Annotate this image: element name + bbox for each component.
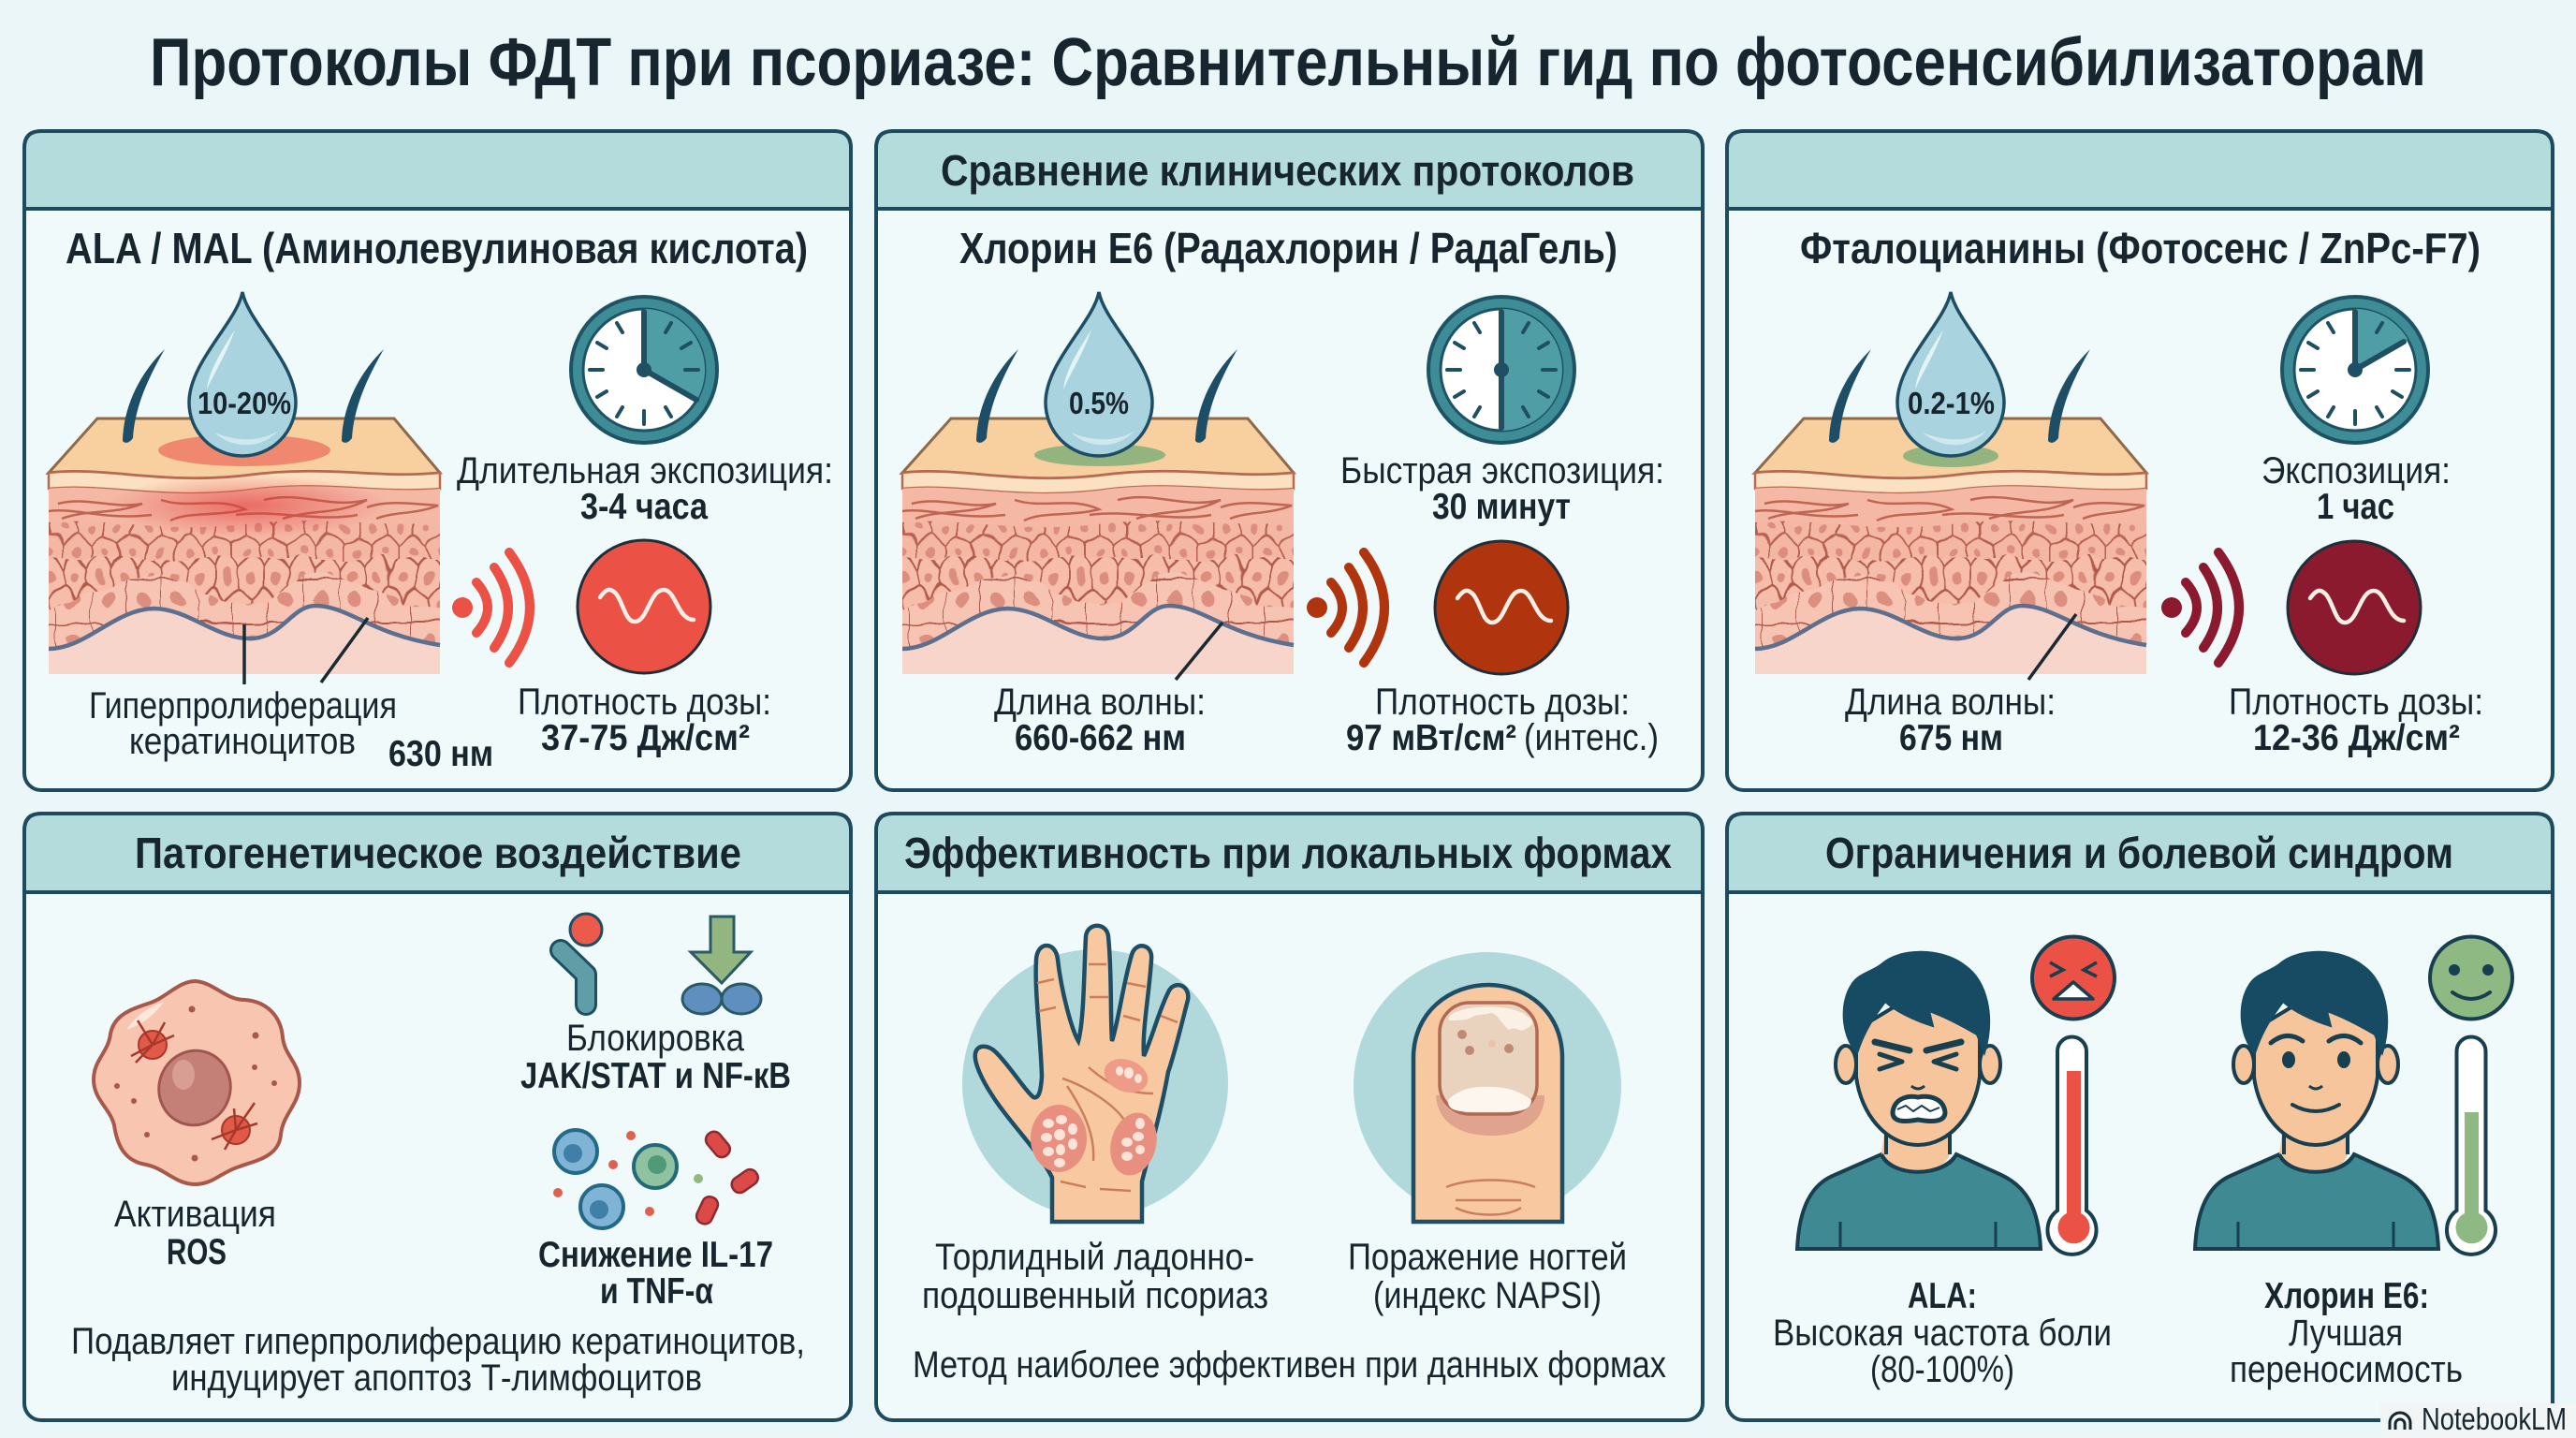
icon: high pain thermometer — [2048, 1037, 2097, 1255]
icon: clock 1 hour — [2282, 297, 2428, 443]
icon: wave circle — [578, 540, 710, 673]
label: ALA pain: ALA: — [1908, 1276, 1977, 1316]
heading: ALA / MAL: ALA / MAL (Аминолевулиновая кислота) — [66, 224, 808, 272]
label: Chlorin tolerance: переносимость — [2230, 1349, 2463, 1390]
icon: palm with plaques — [962, 926, 1228, 1222]
label: nail lesion: Поражение ногтей — [1348, 1237, 1627, 1278]
label: hyperproliferation: кератиноцитов — [129, 721, 356, 762]
dose density: 37-75 Дж/см² — [541, 718, 750, 758]
label: JAK/STAT block: Блокировка — [566, 1018, 745, 1059]
dose density: 12-36 Дж/см² — [2253, 718, 2460, 758]
dose density — [1346, 682, 1659, 758]
summary text — [71, 1321, 805, 1399]
icon: wave circle — [1435, 541, 1568, 674]
skin cross-section with drop: 0.5% — [1069, 386, 1129, 420]
label: ROS activation — [114, 1194, 276, 1272]
icon: receptor — [561, 914, 602, 1005]
dose density: 97 мВт/см² — [1346, 718, 1516, 758]
label: cytokines reduction: и TNF-α — [600, 1271, 713, 1312]
skin cross-section with lesion and drop: 10-20% — [198, 386, 291, 420]
label: ALA pain: (80-100%) — [1870, 1349, 2014, 1390]
heading: Ограничения и болевой синдром — [1825, 829, 2453, 877]
dose density — [2229, 682, 2483, 758]
icon: angry emoji — [2032, 936, 2115, 1019]
summary text: индуцирует апоптоз Т-лимфоцитов — [171, 1357, 702, 1399]
heading: Патогенетическое воздействие — [135, 829, 741, 877]
label: hyperproliferation — [89, 685, 397, 762]
icon: cell with ROS — [94, 981, 300, 1184]
label: cytokines reduction: Снижение IL-17 — [538, 1235, 773, 1275]
label: Chlorin tolerance: Лучшая — [2289, 1313, 2403, 1354]
label: ALA pain: Высокая частота боли — [1773, 1313, 2112, 1354]
icon: blocking arrow and ovals — [682, 917, 761, 1014]
panel: Phthalocyanines protocol — [1727, 131, 2553, 790]
summary text: Метод наиболее эффективен при данных формах — [913, 1344, 1666, 1386]
panel: limitations and pain — [1727, 814, 2553, 1420]
label: ALA pain — [1773, 1276, 2112, 1390]
dose density — [518, 682, 771, 758]
icon: calm person — [2195, 952, 2438, 1249]
exposure text: 3-4 часа — [580, 487, 708, 527]
skin cross-section with drop: 0.2-1% — [1908, 386, 1995, 420]
exposure text: Быстрая экспозиция: — [1340, 450, 1664, 492]
wavelength — [1845, 682, 2056, 758]
exposure text — [1340, 450, 1664, 527]
exposure text — [2261, 450, 2451, 527]
icon: light signal — [2161, 552, 2239, 663]
panel: efficacy in local forms — [876, 814, 1703, 1420]
exposure text — [457, 450, 833, 527]
skin cross-section with lesion and drop — [30, 292, 459, 684]
label: palmoplantar psoriasis: Торлидный ладонно- — [935, 1237, 1254, 1278]
exposure text: Длительная экспозиция: — [457, 450, 833, 492]
skin cross-section with drop — [1736, 292, 2165, 680]
label: Chlorin tolerance — [2230, 1276, 2463, 1390]
label: palmoplantar psoriasis — [922, 1237, 1268, 1316]
section heading: Сравнение клинических протоколов — [941, 146, 1634, 195]
icon: light signal — [1307, 552, 1384, 663]
heading: Phthalocyanines: Фталоцианины (Фотосенс / ZnPc-F7) — [1800, 224, 2481, 272]
wavelength: 675 нм — [1899, 718, 2003, 758]
wavelength: 660-662 нм — [1015, 718, 1186, 758]
icon: immune cells and cytokines — [553, 1128, 761, 1228]
label: JAK/STAT block — [520, 1018, 791, 1096]
heading: Chlorin E6: Хлорин Е6 (Радахлорин / РадаГель) — [959, 224, 1617, 272]
exposure text: 1 час — [2317, 487, 2394, 527]
icon: clock 30 minutes — [1428, 297, 1574, 443]
icon: happy emoji — [2430, 936, 2512, 1019]
panel: pathogenetic action — [24, 814, 851, 1420]
icon: light signal — [452, 552, 530, 663]
dose density: Плотность дозы: — [518, 682, 771, 723]
icon: nail with psoriasis — [1354, 952, 1621, 1222]
icon: wave circle — [2288, 541, 2421, 674]
label: palmoplantar psoriasis: подошвенный псориаз — [922, 1275, 1268, 1316]
exposure text: 30 минут — [1432, 487, 1571, 527]
panel: Chlorin E6 protocol — [876, 131, 1703, 790]
skin cross-section with drop — [884, 292, 1312, 680]
icon: low pain thermometer — [2447, 1037, 2496, 1255]
heading: Эффективность при локальных формах — [904, 829, 1672, 877]
icon: person in pain — [1797, 952, 2041, 1249]
wavelength: Длина волны: — [994, 682, 1206, 723]
summary text: Подавляет гиперпролиферацию кератиноцитов, — [71, 1321, 805, 1362]
label: Chlorin tolerance: Хлорин Е6: — [2264, 1276, 2429, 1316]
panel: ALA / MAL protocol — [24, 131, 851, 790]
label: ROS activation: Активация — [114, 1194, 276, 1235]
wavelength — [994, 682, 1206, 758]
label: hyperproliferation: Гиперпролиферация — [89, 685, 397, 726]
wavelength: 630 нм — [388, 734, 493, 774]
dose density: (интенс.) — [1524, 717, 1659, 758]
dose density: Плотность дозы: — [1375, 682, 1630, 723]
label: cytokines reduction — [538, 1235, 773, 1312]
icon: clock 3-4 hours — [571, 297, 717, 443]
dose density: Плотность дозы: — [2229, 682, 2483, 723]
label: nail lesion: (индекс NAPSI) — [1373, 1275, 1602, 1316]
label: JAK/STAT block: JAK/STAT и NF-кВ — [520, 1056, 791, 1096]
label: ROS activation: ROS — [167, 1232, 227, 1272]
wavelength: Длина волны: — [1845, 682, 2056, 723]
label: nail lesion — [1348, 1237, 1627, 1316]
exposure text: Экспозиция: — [2261, 450, 2451, 492]
